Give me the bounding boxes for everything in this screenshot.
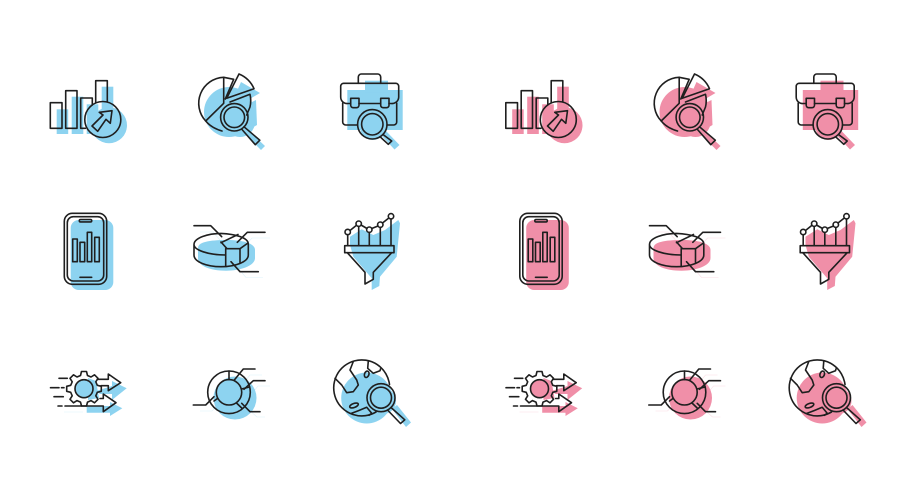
icon: bar chart with growth arrow, pink xyxy=(506,81,582,143)
panel: blue icon set xyxy=(50,74,411,427)
icon: donut chart with leader lines xyxy=(193,369,270,420)
icon: smartphone with bar chart, pink xyxy=(520,213,569,290)
panel: pink icon set xyxy=(506,74,866,427)
icon: sales funnel with line chart xyxy=(345,214,400,290)
icon: donut chart with leader lines, pink xyxy=(649,369,726,420)
icon: globe with magnifier, pink xyxy=(789,360,866,427)
icon: briefcase with magnifier xyxy=(341,74,403,150)
icon: pie chart with magnifier xyxy=(199,74,265,150)
icon: bar chart with growth arrow xyxy=(50,81,127,143)
icon: 3D pie chart with leader lines xyxy=(194,226,270,278)
icon: smartphone with bar chart xyxy=(64,213,113,290)
icon: 3D pie chart with leader lines, pink xyxy=(650,226,726,278)
icon: sales funnel with line chart, pink xyxy=(800,214,856,290)
icon: gear with forward arrows, pink xyxy=(506,372,582,416)
icon: pie chart with magnifier, pink xyxy=(654,74,720,150)
icon: briefcase with magnifier, pink xyxy=(796,74,858,150)
icon: globe with magnifier xyxy=(334,360,411,427)
icon: gear with forward arrows xyxy=(50,372,127,416)
